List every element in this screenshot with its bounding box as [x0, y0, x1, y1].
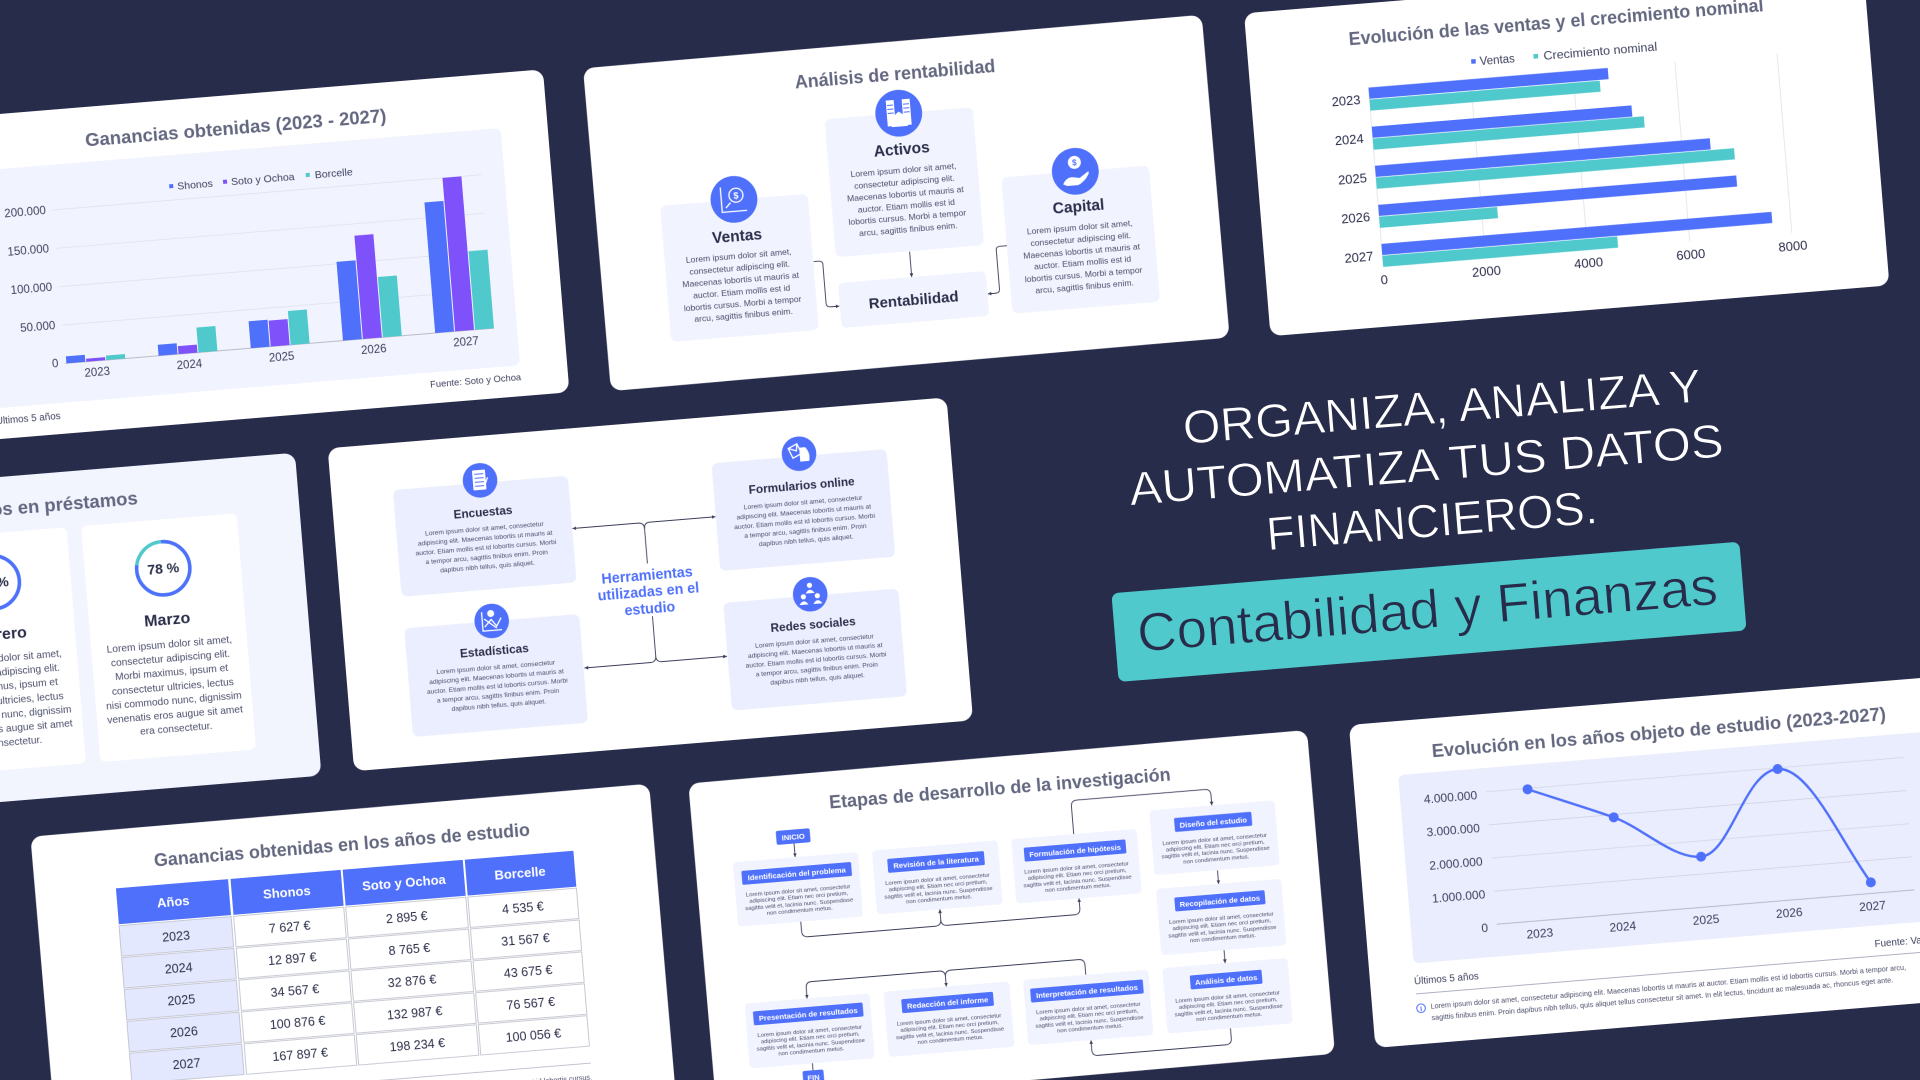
panel: evolución ventas horizontal bar card [1244, 0, 1889, 336]
step: presentación de resultados: non condimentum metus. [778, 1046, 845, 1058]
flow connectors [792, 789, 1232, 1079]
table: 2 895 € [385, 909, 428, 926]
step: interpretación de resultados: Lorem ipsum dolor sit amet, consectetur [1036, 1002, 1141, 1016]
step: identificación del problema: sagittis velit et, lacinia nunc. Suspendisse [745, 897, 854, 912]
table: 31 567 € [501, 931, 550, 949]
table: 7 627 € [268, 919, 311, 936]
panel: préstamos card [0, 453, 321, 827]
connectors [572, 517, 727, 668]
subcard: marzo [81, 513, 256, 762]
box: estadísticas: Estadísticas [459, 641, 530, 661]
box: activos: Lorem ipsum dolor sit amet, [850, 161, 957, 179]
box: rentabilidad: Rentabilidad [868, 288, 959, 313]
box: capital: Capital [1052, 197, 1105, 218]
step: diseño del estudio: adipiscing elit. Etiam nec orci pretium, [1166, 839, 1265, 854]
step: recopilación de datos: sagittis velit et, lacinia nunc. Suspendisse [1168, 925, 1277, 940]
subcard: marzo: Lorem ipsum dolor sit amet, [106, 635, 232, 656]
title: ganancias en los años de estudio: Ganancias obtenidas en los años de estudio [153, 819, 531, 871]
box: ventas: consectetur adipiscing elit. [689, 259, 790, 277]
table: 76 567 € [506, 995, 556, 1013]
step: presentación de resultados [745, 993, 875, 1068]
step: redacción del informe [883, 981, 1014, 1057]
bar chart: 50.000 [20, 320, 56, 335]
box: formularios online [710, 429, 895, 571]
horizontal bar chart: 2024 [1334, 131, 1364, 148]
horizontal bar chart: 2025 [1337, 170, 1367, 188]
pill: inicio [776, 828, 811, 845]
step: interpretación de resultados: adipiscing elit. Etiam nec orci pretium, [1039, 1009, 1139, 1023]
horizontal bar chart [1331, 53, 1808, 290]
legend: Crecimiento nominal [1543, 42, 1658, 63]
table [116, 851, 589, 1080]
line chart: 0 [1481, 921, 1489, 935]
step: redacción del informe: adipiscing elit. Etiam nec orci pretium, [900, 1020, 999, 1034]
line chart: 2024 [1609, 919, 1637, 935]
table: 12 897 € [267, 950, 317, 968]
step: formulación de hipótesis: adipiscing elit. Etiam nec orci pretium, [1028, 868, 1127, 882]
table: 2024 [164, 960, 193, 977]
title: etapas de desarrollo: Etapas de desarrollo de la investigación [828, 763, 1171, 812]
box: ventas: Ventas [712, 226, 763, 247]
title: evolución en los años: Evolución en los años objeto de estudio (2023-2027) [1431, 703, 1887, 761]
panel: análisis de rentabilidad card [583, 15, 1230, 391]
box: estadísticas: a tempor arcu, sagittis finibus enim. Proin [437, 688, 560, 705]
table: Años [156, 893, 190, 911]
box: formularios online: Formularios online [748, 474, 856, 497]
step: análisis de datos [1162, 958, 1293, 1034]
subcard: marzo: Marzo [144, 610, 191, 631]
step: redacción del informe: sagittis velit et, lacinia nunc. Suspendisse [896, 1026, 1005, 1041]
headline text: AUTOMATIZA TUS DATOS [1127, 414, 1725, 515]
step: formulación de hipótesis: Lorem ipsum dolor sit amet, consectetur [1024, 861, 1129, 876]
center label: herramientas: Herramientas [601, 564, 693, 588]
center label: herramientas: estudio [624, 599, 676, 619]
box: capital: consectetur adipiscing elit. [1030, 230, 1131, 248]
box: ventas: Maecenas lobortis ut mauris at [682, 270, 800, 289]
step: interpretación de resultados: sagittis velit et, lacinia nunc. Suspendisse [1035, 1015, 1144, 1030]
box: capital: Maecenas lobortis ut mauris at [1023, 241, 1141, 261]
line chart: 2027 [1859, 898, 1887, 914]
bar chart [4, 169, 495, 385]
step: revisión de la literatura: adipiscing elit. Etiam nec orci pretium, [889, 880, 988, 894]
step: interpretación de resultados [1023, 970, 1153, 1045]
table: 34 567 € [270, 982, 320, 1000]
title: análisis de rentabilidad: Análisis de rentabilidad [794, 55, 996, 92]
step: recopilación de datos: Recopilación de datos [1179, 894, 1260, 909]
subcard: marzo: consectetur ultricies, lectus [111, 677, 234, 698]
panel: herramientas card [328, 397, 973, 771]
box: ventas [658, 170, 819, 342]
line chart: 3.000.000 [1426, 821, 1481, 840]
table: 198 234 € [389, 1036, 446, 1054]
source note: Fuente: Soto y Ochoa [430, 371, 522, 390]
chart panel background [1398, 732, 1920, 963]
step: identificación del problema [733, 852, 863, 927]
banner: contabilidad y finanzas [1111, 542, 1747, 682]
step: diseño del estudio: Diseño del estudio [1179, 815, 1248, 830]
box: capital: auctor. Etiam mollis est id [1034, 254, 1132, 272]
step: análisis de datos: adipiscing elit. Etiam nec orci pretium, [1179, 997, 1278, 1011]
box: encuestas: auctor. Etiam mollis est id lobortis cursus. Morbi [415, 539, 557, 557]
headline text: ORGANIZA, ANALIZA Y [1181, 359, 1703, 454]
step: diseño del estudio [1149, 800, 1280, 875]
footnote text: sagittis finibus enim. Proin dapibus nibh tellus, quis aliquet tellus consectetur sit amet. In elit lectus, tincidunt ac malesuada ac, rhoncus eget ante. [1431, 975, 1893, 1022]
line chart: 2023 [1526, 925, 1554, 942]
line chart [1423, 753, 1916, 949]
horizontal bar chart: 2027 [1344, 248, 1374, 266]
step: presentación de resultados: Presentación de resultados [759, 1006, 858, 1023]
box: estadísticas: dapibus nibh tellus, quis aliquet. [451, 698, 547, 713]
step: diseño del estudio: Lorem ipsum dolor sit amet, consectetur [1162, 833, 1267, 847]
footnote text: Lorem ipsum dolor sit amet, consectetur adipiscing elit. Maecenas lobortis ut mauris at auctor. Etiam mollis est id lobortis cursus. Morbi a tempor arcu, [1430, 963, 1906, 1011]
table: 100 056 € [505, 1026, 562, 1045]
step: recopilación de datos: adipiscing elit. Etiam nec orci pretium, [1172, 918, 1272, 932]
box: estadísticas: Lorem ipsum dolor sit amet, consectetur [436, 659, 556, 676]
box: activos: auctor. Etiam mollis est id [857, 197, 956, 215]
box: formularios online: Lorem ipsum dolor sit amet, consectetur [744, 495, 863, 511]
table: Shonos [262, 883, 311, 902]
box: activos [823, 84, 984, 257]
step: formulación de hipótesis: non condimentum metus. [1045, 883, 1112, 894]
legend: Borcelle [314, 166, 353, 181]
table: 2025 [167, 992, 196, 1009]
table: 167 897 € [272, 1046, 329, 1064]
box: ventas: auctor. Etiam mollis est id [693, 282, 791, 300]
pill: fin [802, 1069, 825, 1080]
step: recopilación de datos: Lorem ipsum dolor sit amet, consectetur [1169, 911, 1274, 926]
step: formulación de hipótesis: sagittis velit et, lacinia nunc. Suspendisse [1023, 874, 1133, 889]
pill: inicio: INICIO [781, 832, 805, 843]
box: capital: lobortis cursus. Morbi a tempor [1024, 265, 1143, 284]
box: activos: Activos [873, 139, 930, 161]
panel: tabla de ganancias card [30, 784, 677, 1080]
headline text [1122, 357, 1730, 571]
step: revisión de la literatura: non condimentum metus. [906, 894, 973, 906]
subcard: febrero [0, 527, 86, 776]
legend: Soto y Ochoa [231, 171, 295, 188]
step: diseño del estudio: sagittis velit et, lacinia nunc. Suspendisse [1162, 846, 1271, 861]
step: identificación del problema: Lorem ipsum dolor sit amet, consectetur [746, 884, 851, 899]
step: redacción del informe: non condimentum metus. [918, 1035, 984, 1046]
step: identificación del problema: Identificación del problema [747, 865, 847, 882]
step: revisión de la literatura: sagittis velit et, lacinia nunc. Suspendisse [884, 886, 994, 901]
box: estadísticas: auctor. Etiam mollis est id lobortis cursus. Morbi [427, 677, 568, 696]
step: recopilación de datos: non condimentum metus. [1190, 933, 1257, 945]
step: identificación del problema: adipiscing elit. Etiam nec orci pretium, [749, 891, 849, 905]
chart panel background [0, 128, 520, 408]
table: 2027 [172, 1056, 201, 1072]
table: 132 987 € [386, 1004, 443, 1023]
headline text: FINANCIEROS. [1264, 480, 1599, 560]
box: activos: consectetur adipiscing elit. [854, 173, 955, 191]
box: ventas: Lorem ipsum dolor sit amet, [685, 247, 792, 265]
bar chart: 2027 [453, 336, 479, 350]
legend: Ventas [1479, 53, 1516, 68]
bar chart: 0 [52, 358, 59, 371]
step: presentación de resultados: Lorem ipsum dolor sit amet, consectetur [757, 1025, 862, 1039]
step: análisis de datos: Análisis de datos [1195, 973, 1258, 987]
bar chart: 2024 [176, 358, 203, 372]
period note: Últimos 5 años [1414, 971, 1479, 987]
box: formularios online: dapibus nibh tellus, quis aliquet. [759, 534, 854, 548]
step: interpretación de resultados: non condimentum metus. [1057, 1023, 1124, 1035]
legend [1471, 42, 1658, 69]
box: encuestas: Lorem ipsum dolor sit amet, consectetur [425, 521, 545, 538]
box: estadísticas: adipiscing elit. Maecenas lobortis ut mauris at [429, 668, 564, 686]
box: redes sociales: a tempor arcu, sagittis finibus enim. Proin [755, 661, 878, 678]
horizontal bar chart: 4000 [1574, 254, 1604, 272]
step: presentación de resultados: sagittis velit et, lacinia nunc. Suspendisse [757, 1038, 866, 1053]
box: ventas: $ [733, 191, 739, 201]
box: redes sociales: Lorem ipsum dolor sit amet, consectetur [755, 633, 875, 650]
horizontal bar chart: 6000 [1676, 246, 1706, 263]
step: presentación de resultados: adipiscing elit. Etiam nec orci pretium, [761, 1031, 860, 1046]
box: estadísticas [403, 597, 588, 737]
step: formulación de hipótesis: Formulación de hipótesis [1029, 843, 1121, 859]
bar chart: 150.000 [7, 243, 49, 259]
box: redes sociales: auctor. Etiam mollis est id lobortis cursus. Morbi [745, 651, 887, 670]
subcard: marzo: consectetur adipiscing elit. [111, 649, 231, 670]
line chart: 2026 [1775, 905, 1803, 921]
subcard: marzo: venenatis eros augue sit amet [107, 704, 243, 726]
table: Borcelle [494, 864, 546, 883]
step: revisión de la literatura: Revisión de la literatura [893, 854, 980, 870]
box: capital [999, 142, 1160, 314]
horizontal bar chart: 2023 [1331, 92, 1361, 109]
legend [169, 166, 353, 193]
line chart: 1.000.000 [1431, 888, 1486, 906]
panel: evolución line chart card [1349, 674, 1920, 1048]
icon: info [1416, 1004, 1426, 1013]
table: 2023 [162, 928, 191, 945]
arrow: activos to rentabilidad [910, 252, 912, 277]
box: encuestas [391, 456, 577, 597]
title: ganancias obtenidas: Ganancias obtenidas (2023 - 2027) [84, 105, 387, 151]
line chart: 4.000.000 [1423, 788, 1478, 807]
divider and note [133, 1063, 592, 1080]
line chart: 2025 [1692, 912, 1720, 928]
arrow: ventas to rentabilidad [814, 260, 839, 308]
box: capital: arcu, sagittis finibus enim. [1035, 277, 1134, 295]
table: 100 876 € [269, 1014, 326, 1032]
step: revisión de la literatura: Lorem ipsum dolor sit amet, consectetur [885, 873, 990, 887]
bar chart: 2026 [361, 343, 387, 357]
step: análisis de datos: non condimentum metus. [1196, 1012, 1263, 1023]
box: formularios online: auctor. Etiam mollis est id lobortis cursus. Morbi [734, 513, 876, 531]
box: activos: lobortis cursus. Morbi a tempor [848, 208, 967, 227]
subcard: marzo: nisi commodo nunc, dignissim [106, 690, 242, 712]
box: encuestas: Encuestas [453, 503, 513, 522]
step: formulación de hipótesis [1011, 829, 1142, 904]
legend: Shonos [177, 178, 213, 193]
subcard: marzo: 78 % [147, 559, 180, 578]
box: capital: Lorem ipsum dolor sit amet, [1026, 218, 1133, 236]
bar chart: 2023 [84, 366, 111, 380]
step: análisis de datos: Lorem ipsum dolor sit amet, consectetur [1175, 990, 1280, 1005]
box: redes sociales: Redes sociales [770, 614, 857, 635]
bar chart: 200.000 [4, 205, 46, 220]
box: encuestas: adipiscing elit. Maecenas lobortis ut mauris at [418, 530, 553, 548]
box: redes sociales: adipiscing elit. Maecenas lobortis ut mauris at [748, 642, 883, 660]
table: 4 535 € [502, 899, 544, 917]
horizontal bar chart: 0 [1380, 272, 1389, 287]
step: revisión de la literatura [872, 840, 1003, 914]
box: encuestas: a tempor arcu, sagittis finibus enim. Proin [425, 549, 548, 566]
horizontal bar chart: 8000 [1778, 237, 1808, 255]
table: 32 876 € [387, 972, 437, 990]
step: diseño del estudio: non condimentum metus. [1183, 854, 1250, 866]
table: 8 765 € [388, 941, 431, 958]
table: Soto y Ochoa [362, 872, 447, 894]
box: ventas: arcu, sagittis finibus enim. [694, 306, 793, 324]
bar chart: 2025 [268, 351, 295, 365]
table: 2026 [170, 1024, 198, 1040]
panel: etapas de desarrollo card [688, 730, 1335, 1080]
box: rentabilidad [838, 271, 989, 328]
step: redacción del informe: Lorem ipsum dolor sit amet, consectetur [897, 1013, 1002, 1028]
divider line [1416, 950, 1920, 994]
subcard: marzo: era consectetur. [140, 721, 213, 738]
box: formularios online: a tempor arcu, sagittis finibus enim. Proin [744, 523, 867, 540]
step: redacción del informe: Redacción del informe [907, 995, 989, 1011]
horizontal bar chart: 2026 [1341, 209, 1371, 227]
box: redes sociales [722, 570, 907, 711]
panel: ganancias bar chart card [0, 69, 569, 443]
horizontal bar chart: 2000 [1471, 263, 1501, 280]
box: activos: Maecenas lobortis ut mauris at [847, 184, 965, 203]
step: interpretación de resultados: Interpretación de resultados [1036, 983, 1138, 1000]
box: capital: $ [1072, 158, 1078, 168]
box: encuestas: dapibus nibh tellus, quis aliquet. [440, 560, 535, 574]
line chart: 2.000.000 [1429, 855, 1483, 873]
subcard: marzo: Morbi maximus, ipsum et [115, 663, 229, 683]
step: identificación del problema: non condimentum metus. [767, 906, 833, 917]
step: análisis de datos: sagittis velit et, lacinia nunc. Suspendisse [1174, 1003, 1284, 1018]
banner: contabilidad y finanzas: Contabilidad y Finanzas [1135, 556, 1720, 664]
box: ventas: lobortis cursus. Morbi a tempor [683, 293, 802, 313]
step: recopilación de datos [1156, 879, 1286, 955]
box: formularios online: adipiscing elit. Maecenas lobortis ut mauris at [736, 503, 872, 522]
arrow: capital to rentabilidad [984, 246, 1011, 294]
bar chart: 100.000 [10, 282, 53, 297]
box: redes sociales: dapibus nibh tellus, quis aliquet. [770, 672, 865, 687]
box: activos: arcu, sagittis finibus enim. [859, 220, 958, 238]
table: 43 675 € [503, 963, 553, 981]
center label: herramientas: utilizadas en el [597, 581, 700, 605]
